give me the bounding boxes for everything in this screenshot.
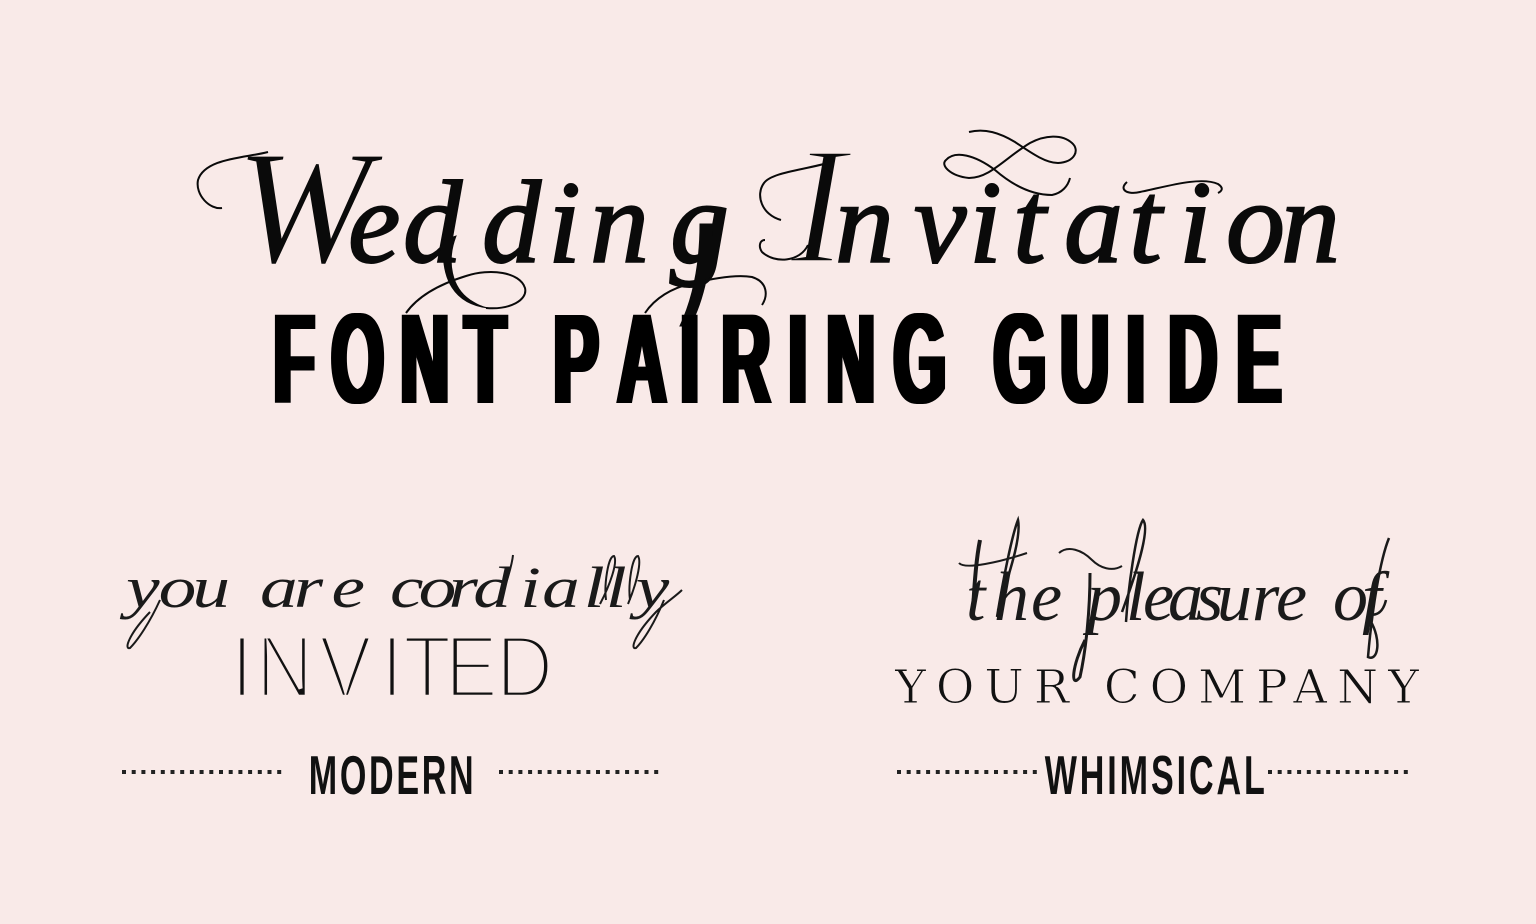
whimsical script line [959, 520, 1390, 681]
whimsical sample [894, 520, 1420, 806]
title: script line: I [789, 113, 853, 299]
whimsical script line: the pleasure of [966, 559, 1390, 636]
modern script line [119, 555, 682, 648]
whimsical serif line: YOUR COMPANY [894, 660, 1420, 715]
modern sans line: INVITED [231, 617, 553, 716]
title: script line: W [236, 119, 384, 298]
modern sample [119, 555, 682, 806]
title: script line: nvitation [835, 157, 1340, 288]
title: script line: edding [348, 157, 770, 288]
title: bold condensed line: FONT PAIRING GUIDE [273, 287, 1282, 430]
title: script line [198, 113, 1340, 326]
whimsical label: WHIMSICAL [1045, 745, 1265, 806]
modern label: MODERN [309, 745, 474, 806]
modern script line: you are cordially [119, 555, 669, 620]
